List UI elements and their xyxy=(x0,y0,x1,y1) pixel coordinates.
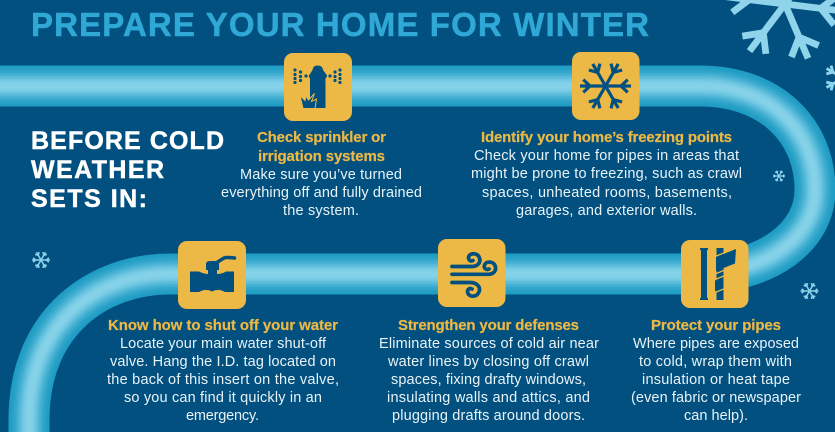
panel: defenses xyxy=(379,239,599,424)
text: shut off water: the back of this insert on the valve, xyxy=(107,372,339,388)
title: PREPARE YOUR HOME FOR WINTER xyxy=(31,6,649,43)
subheading: SETS IN: xyxy=(31,185,147,213)
text: defenses: insulating walls and attics, and xyxy=(387,390,590,406)
panel: protect pipes xyxy=(631,240,801,424)
winding pipe xyxy=(0,86,815,432)
small snowflake left xyxy=(32,251,50,269)
text: freezing points xyxy=(471,129,742,219)
small snowflake right xyxy=(773,170,785,182)
text: sprinkler xyxy=(221,129,422,219)
panel: freezing points xyxy=(471,52,742,219)
text: freezing points: garages, and exterior walls. xyxy=(516,203,697,219)
text: shut off water: emergency. xyxy=(186,408,259,424)
icon: wind xyxy=(438,239,506,307)
text: sprinkler: Check sprinkler or xyxy=(257,129,386,146)
icon: sprinkler xyxy=(284,53,352,121)
icon: snowflake xyxy=(572,52,640,120)
text: sprinkler: Make sure you’ve turned xyxy=(240,167,402,183)
text: protect pipes: insulation or heat tape xyxy=(642,372,790,388)
text: defenses xyxy=(379,317,599,424)
text: protect pipes: to cold, wrap them with xyxy=(639,354,792,370)
text: defenses: Strengthen your defenses xyxy=(398,317,579,334)
text: defenses: water lines by closing off crawl xyxy=(387,354,589,370)
text: defenses: plugging drafts around doors. xyxy=(392,408,585,424)
small snowflake lower right xyxy=(800,282,818,300)
text: freezing points: Identify your home’s freezing points xyxy=(481,129,732,146)
subheading xyxy=(31,127,224,213)
text: shut off water: Locate your main water shut-off xyxy=(120,336,327,352)
text: protect pipes: Protect your pipes xyxy=(651,317,781,334)
text: shut off water: valve. Hang the I.D. tag located on xyxy=(110,354,336,370)
text: defenses: spaces, fixing drafty windows, xyxy=(391,372,586,388)
text: protect pipes: can help). xyxy=(684,408,748,424)
text: defenses: Eliminate sources of cold air near xyxy=(379,336,599,352)
text: freezing points: Check your home for pipes in areas that xyxy=(474,148,739,164)
text: freezing points: might be prone to freezing, such as crawl xyxy=(471,166,742,182)
text: sprinkler: the system. xyxy=(283,203,359,219)
text: protect pipes: (even fabric or newspaper xyxy=(631,390,801,406)
text: sprinkler: everything off and fully drained xyxy=(221,185,422,201)
text: protect pipes: Where pipes are exposed xyxy=(633,336,799,352)
subheading: BEFORE COLD xyxy=(31,127,224,155)
text: sprinkler: irrigation systems xyxy=(258,148,385,165)
icon: wrapped pipes xyxy=(681,240,748,308)
panel: sprinkler xyxy=(221,53,422,219)
text: shut off water xyxy=(107,317,339,424)
large snowflake xyxy=(719,0,835,69)
text: shut off water: Know how to shut off your water xyxy=(108,317,338,334)
text: shut off water: so you can find it quickly in an xyxy=(124,390,322,406)
edge snowflake xyxy=(824,59,835,97)
text: freezing points: spaces, unheated rooms, basements, xyxy=(482,185,732,201)
icon: valve xyxy=(178,241,246,309)
text: protect pipes xyxy=(631,317,801,424)
subheading: WEATHER xyxy=(31,156,164,184)
panel: shut off water xyxy=(107,241,339,424)
